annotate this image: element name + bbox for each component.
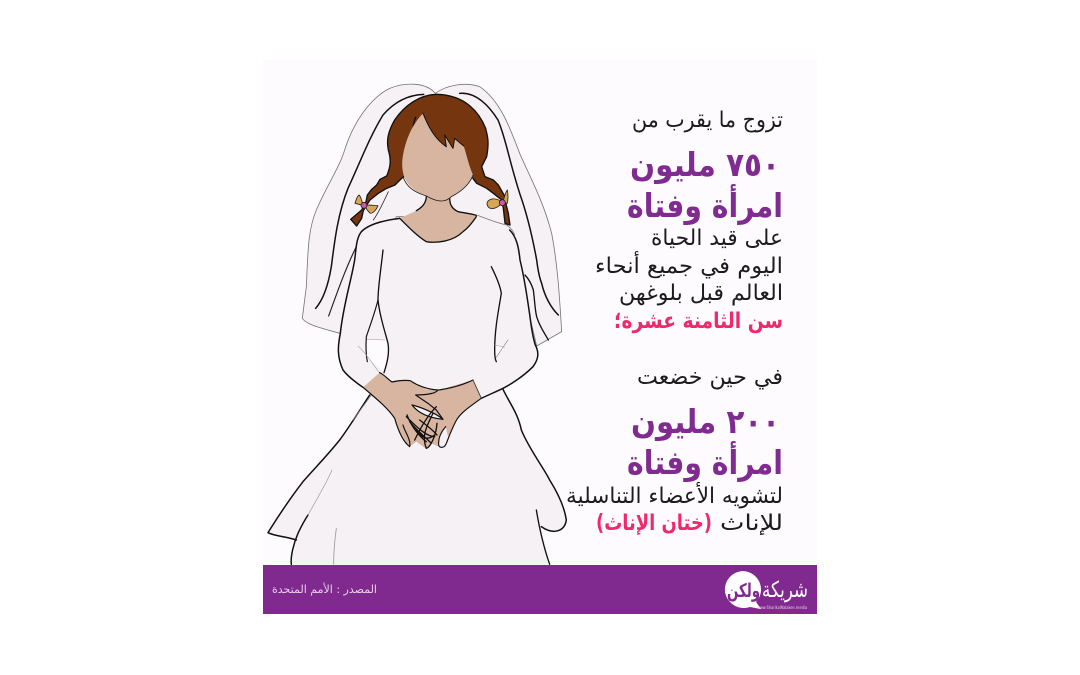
- line: before reaching: العالم قبل بلوغهن: [619, 281, 783, 306]
- line: women and girls: امرأة وفتاة: [627, 441, 783, 483]
- fringe stroke: [423, 113, 464, 148]
- line: mutilation: لتشويه الأعضاء التناسلية: [566, 482, 783, 509]
- line: 750 million: ٧٥٠ مليون: [630, 145, 780, 185]
- logo bubble: [725, 571, 761, 609]
- logo word: sharika: شريكة: [762, 578, 808, 603]
- logo url: www.SharikaWalaken.media: [757, 605, 807, 610]
- logo: [725, 571, 808, 610]
- line: women and girls: امرأة وفتاة: [627, 184, 783, 226]
- source text: المصدر : الأمم المتحدة: [272, 582, 377, 596]
- gap left of torso: [367, 339, 389, 373]
- bodice and sleeves: [308, 215, 538, 515]
- text block: second statistic: [566, 365, 783, 536]
- left bow: [355, 195, 378, 213]
- hands: [363, 373, 481, 449]
- right bow: [487, 190, 508, 209]
- text block: first statistic: [595, 108, 783, 334]
- chin stroke: [403, 175, 473, 201]
- train and skirt: [268, 380, 566, 564]
- neckline stroke: [400, 196, 476, 242]
- logo word: walaken: ولكن: [727, 580, 760, 602]
- line: 200 million: ٢٠٠ مليون: [631, 402, 780, 442]
- footer bar: [263, 565, 817, 614]
- line: intro: تزوج ما يقرب من: [632, 108, 783, 133]
- line: age eighteen: سن الثامنة عشرة؛: [614, 309, 783, 334]
- line: alive: على قيد الحياة: [651, 226, 783, 251]
- line: female: للإناث: [720, 511, 783, 536]
- hair and braids: [351, 94, 510, 226]
- gap right of torso: [495, 345, 506, 357]
- face: [402, 113, 473, 201]
- line: whereas: في حين خضعت: [637, 365, 783, 390]
- neck and chest: [400, 196, 476, 242]
- illustration: bride figure: [268, 84, 566, 564]
- panel: background: [263, 60, 817, 614]
- veil: [302, 84, 562, 346]
- line: today worldwide: اليوم في جميع أنحاء: [595, 251, 783, 279]
- line: FGM highlight: (ختان الإناث): [596, 511, 712, 536]
